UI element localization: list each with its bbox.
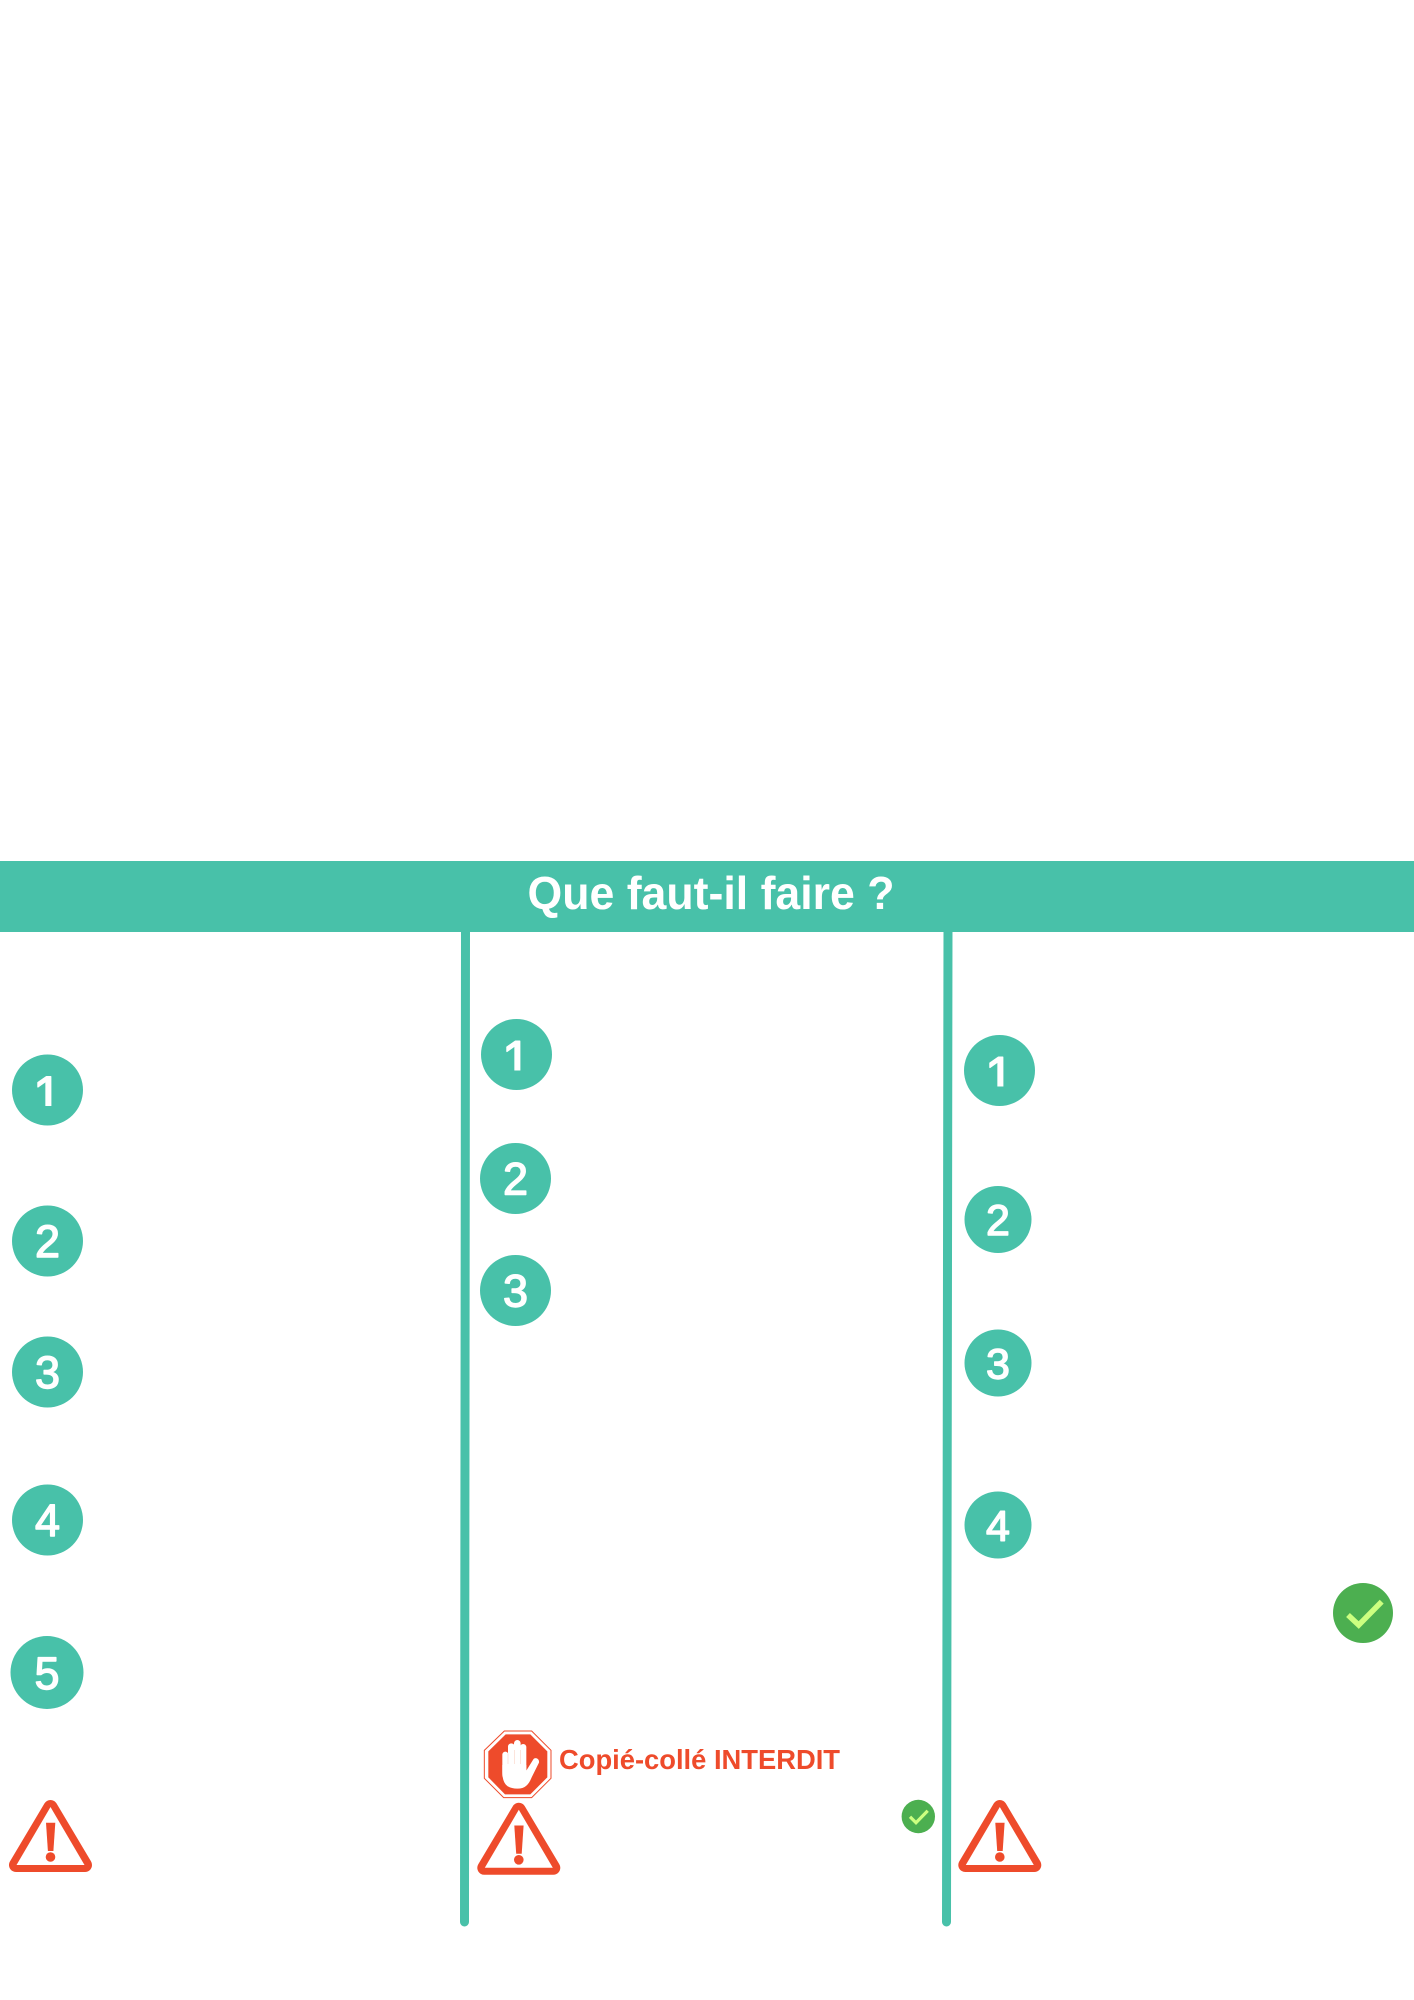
divider: left column rule xyxy=(464,925,466,1922)
badge 4: 4 xyxy=(986,1502,1010,1550)
badge 3 xyxy=(480,1255,551,1326)
panel: middle column numbered badges xyxy=(480,1019,552,1326)
badge 1: 1 xyxy=(33,1066,62,1124)
icon: stop hand xyxy=(484,1731,551,1798)
badge 2 xyxy=(12,1206,83,1276)
title band xyxy=(0,861,1414,932)
badge 4 xyxy=(964,1492,1032,1558)
divider: right column rule xyxy=(946,925,948,1922)
badge 5 xyxy=(10,1636,84,1709)
badge 1 xyxy=(964,1035,1035,1106)
icon: warning triangle middle xyxy=(484,1810,553,1868)
panel: left column numbered badges xyxy=(10,1054,84,1709)
badge 3: 3 xyxy=(986,1340,1010,1388)
badge 3: 3 xyxy=(503,1266,528,1316)
badge 2: 2 xyxy=(986,1197,1010,1245)
badge 4: 4 xyxy=(35,1495,60,1546)
badge 2 xyxy=(480,1143,551,1214)
badge 3 xyxy=(12,1336,83,1408)
badge 2: 2 xyxy=(503,1154,528,1204)
icon: large green check xyxy=(1333,1583,1393,1643)
badge 1: 1 xyxy=(985,1047,1014,1105)
badge 2: 2 xyxy=(35,1216,60,1267)
badge 5: 5 xyxy=(34,1648,60,1699)
badge 2 xyxy=(964,1186,1032,1253)
title band: Que faut-il faire ? xyxy=(528,867,894,919)
icon: warning triangle left xyxy=(16,1807,85,1865)
warning text: copy-paste forbidden: Copié-collé INTERDIT xyxy=(559,1744,840,1775)
badge 4 xyxy=(12,1484,83,1556)
badge 3: 3 xyxy=(35,1347,60,1398)
icon: warning triangle right xyxy=(965,1807,1034,1865)
badge 1: 1 xyxy=(502,1031,531,1089)
icon: small green check xyxy=(902,1800,935,1833)
badge 1 xyxy=(481,1019,552,1090)
badge 1 xyxy=(12,1054,83,1126)
badge 3 xyxy=(964,1330,1032,1396)
panel: right column numbered badges xyxy=(964,1035,1035,1558)
